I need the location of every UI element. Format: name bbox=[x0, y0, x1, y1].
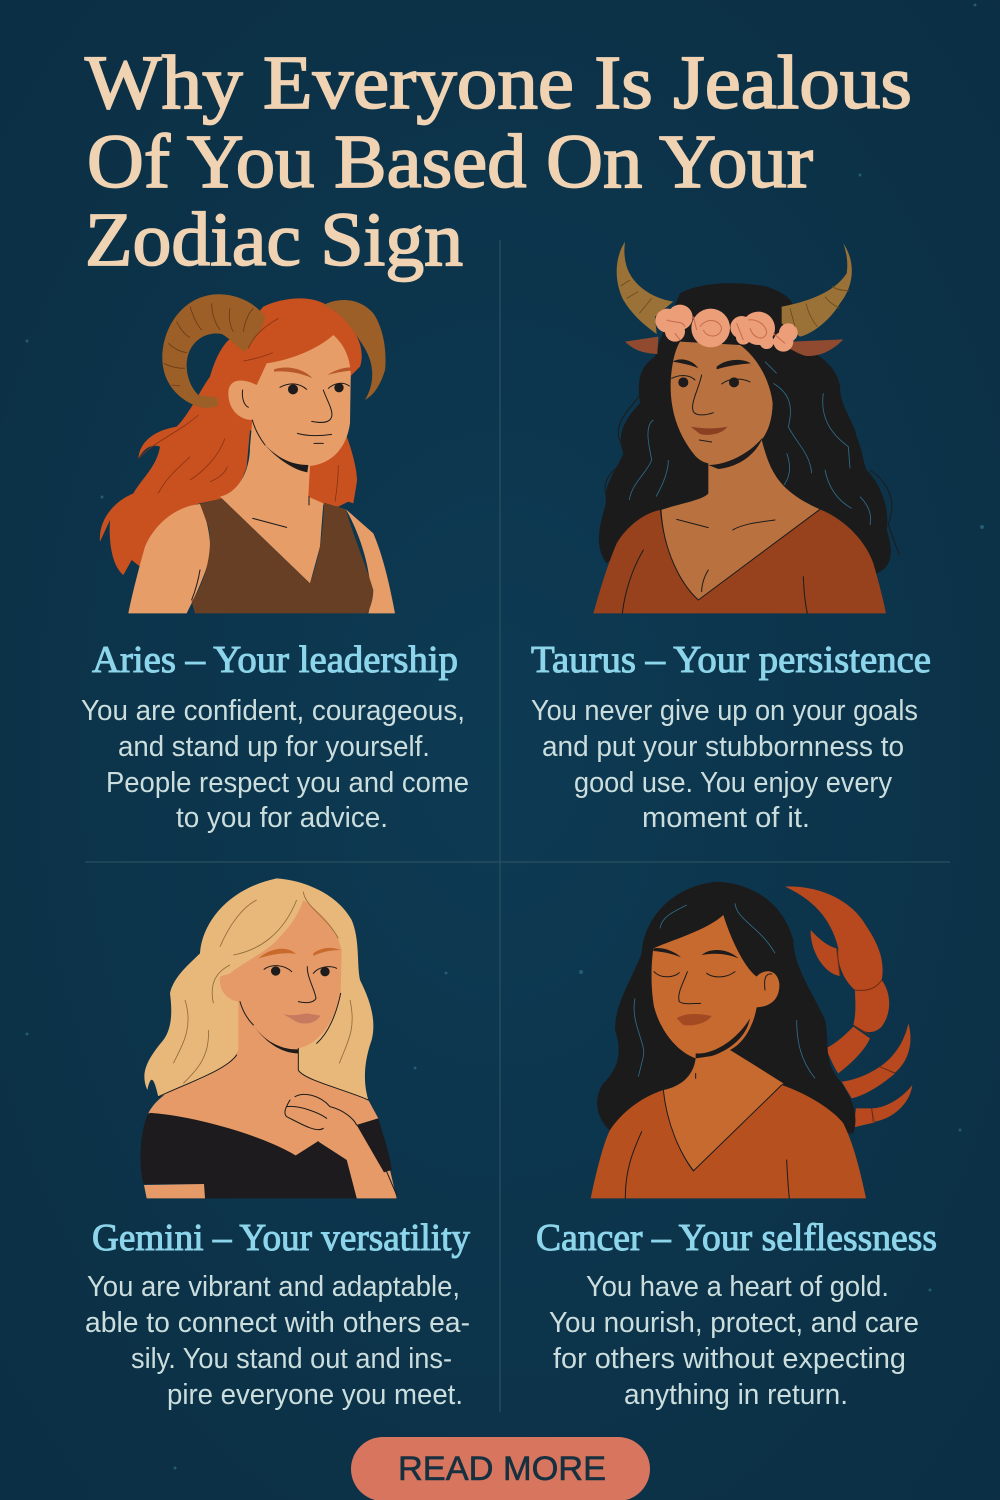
heading: Cancer: Cancer – Your selflessness bbox=[536, 1217, 937, 1259]
button: read more bbox=[351, 1437, 650, 1500]
text: Cancer description: anything in return. bbox=[624, 1379, 848, 1411]
button: read more: READ MORE bbox=[398, 1450, 606, 1488]
text: Aries description: People respect you and come bbox=[106, 767, 469, 799]
illustration: Aries woman with ram horns bbox=[100, 294, 395, 613]
title: Why Everyone Is Jealous bbox=[85, 41, 912, 125]
text: Aries description bbox=[81, 695, 469, 834]
text: Gemini description bbox=[85, 1271, 470, 1411]
text: Taurus description bbox=[531, 695, 918, 834]
text: Aries description: You are confident, courageous, bbox=[81, 695, 465, 727]
text: Taurus description: good use. You enjoy every bbox=[574, 767, 892, 799]
title bbox=[85, 41, 912, 282]
text: Cancer description bbox=[549, 1271, 919, 1411]
heading: Aries: Aries – Your leadership bbox=[92, 639, 458, 681]
title: Of You Based On Your bbox=[87, 120, 813, 204]
text: Cancer description: for others without expecting bbox=[553, 1343, 906, 1375]
text: Cancer description: You have a heart of gold. bbox=[586, 1271, 889, 1303]
text: Gemini description: sily. You stand out and ins- bbox=[131, 1343, 452, 1375]
heading: Gemini: Gemini – Your versatility bbox=[92, 1217, 470, 1259]
text: Aries description: to you for advice. bbox=[176, 802, 388, 834]
text: Aries description: and stand up for yourself. bbox=[118, 731, 430, 763]
illustration: Gemini woman with blonde hair bbox=[141, 878, 397, 1198]
panel: Cancer bbox=[536, 882, 937, 1411]
panel: Aries bbox=[81, 294, 469, 834]
text: Taurus description: moment of it. bbox=[642, 802, 810, 834]
text: Taurus description: You never give up on your goals bbox=[531, 695, 918, 727]
title: Zodiac Sign bbox=[85, 198, 463, 282]
illustration: Cancer woman with crab claw bbox=[591, 882, 912, 1198]
panel: Taurus bbox=[531, 242, 931, 834]
text: Gemini description: You are vibrant and adaptable, bbox=[87, 1271, 460, 1303]
panel: Gemini bbox=[85, 878, 470, 1411]
text: Gemini description: pire everyone you meet. bbox=[167, 1379, 463, 1411]
text: Taurus description: and put your stubbornness to bbox=[542, 731, 904, 763]
illustration: Taurus woman with bull horns and flower crown bbox=[593, 242, 899, 613]
text: Gemini description: able to connect with others ea- bbox=[85, 1307, 470, 1339]
text: Cancer description: You nourish, protect, and care bbox=[549, 1307, 919, 1339]
heading: Taurus: Taurus – Your persistence bbox=[531, 639, 931, 681]
